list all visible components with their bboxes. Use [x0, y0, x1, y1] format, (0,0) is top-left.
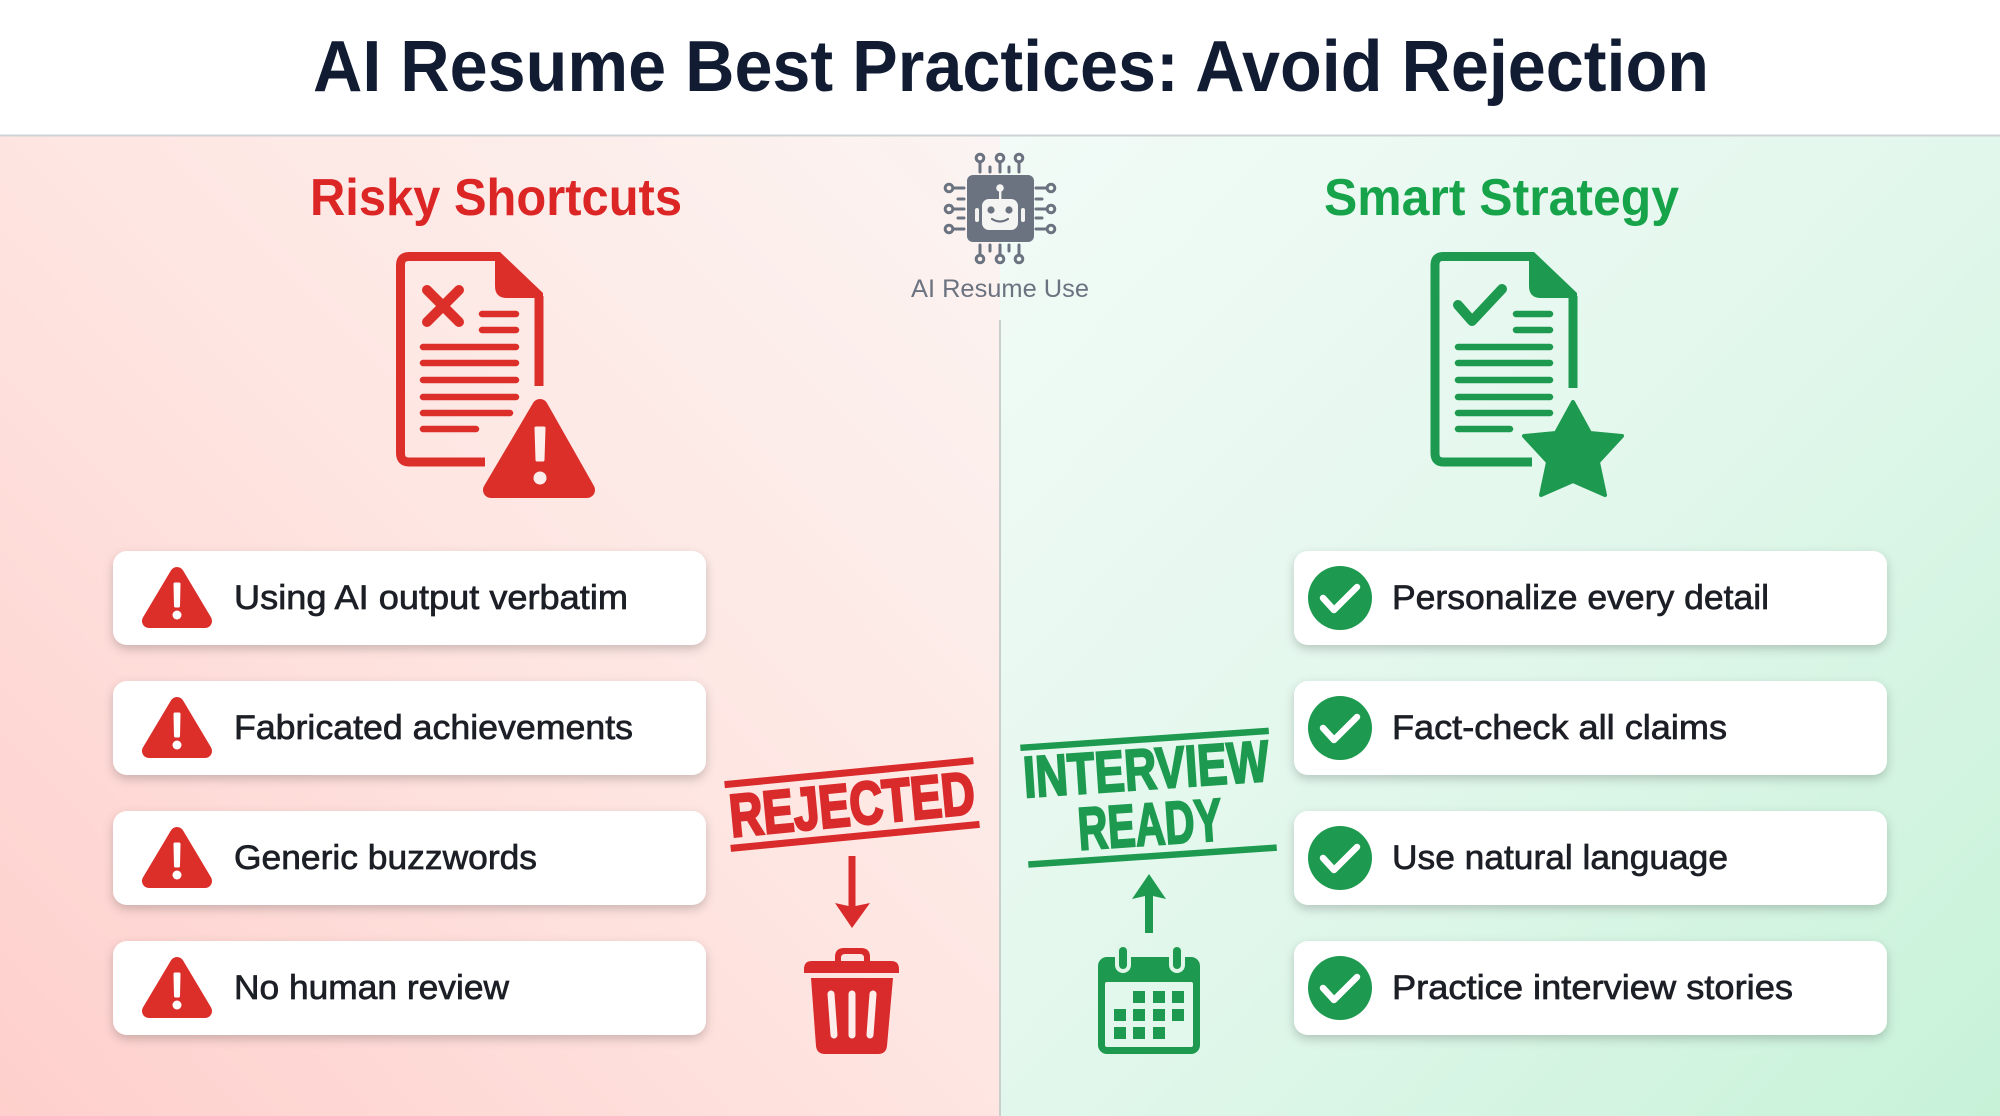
card: No human review: No human review: [234, 969, 509, 1007]
card: Personalize every detail: [1294, 551, 1887, 645]
card: Practice interview stories: [1294, 941, 1887, 1035]
card: Generic buzzwords: [113, 811, 706, 905]
stamp: INTERVIEW READY: READY: [1076, 786, 1224, 863]
stamp: INTERVIEW READY: [1020, 728, 1277, 868]
card: Use natural language: Use natural language: [1392, 839, 1728, 877]
card: Fabricated achievements: [113, 681, 706, 775]
heading: risky shortcuts: Risky Shortcuts: [310, 169, 682, 227]
header band: [0, 0, 2000, 135]
icon: approved resume with star: [1435, 252, 1622, 495]
card: Use natural language: [1294, 811, 1887, 905]
panel: smart list: [1294, 551, 1887, 1035]
heading: smart strategy: Smart Strategy: [1324, 169, 1679, 227]
panel: risky list: [113, 551, 706, 1035]
icon: calendar: [1098, 943, 1200, 1054]
arrow: up from calendar: [1132, 874, 1166, 933]
card: Fact-check all claims: [1294, 681, 1887, 775]
title: AI Resume Best Practices: Avoid Rejection: [313, 27, 1709, 107]
stamp: REJECTED: REJECTED: [726, 759, 978, 850]
icon: AI chip with robot: [945, 154, 1055, 263]
stamp: INTERVIEW READY: INTERVIEW: [1021, 729, 1271, 810]
card: Fabricated achievements: Fabricated achievements: [234, 709, 633, 747]
card: No human review: [113, 941, 706, 1035]
arrow: down to trash: [835, 856, 870, 928]
card: Generic buzzwords: Generic buzzwords: [234, 839, 537, 877]
card: Personalize every detail: Personalize every detail: [1392, 579, 1769, 617]
card: Fact-check all claims: Fact-check all claims: [1392, 709, 1727, 747]
card: Using AI output verbatim: Using AI output verbatim: [234, 579, 628, 617]
icon: trash can: [804, 948, 899, 1054]
icon: rejected resume with warning: [400, 252, 587, 490]
label: AI Resume Use: AI Resume Use: [911, 275, 1089, 303]
panel: risky shortcuts background: [0, 135, 1000, 1116]
panel: smart strategy background: [1000, 135, 2000, 1116]
card: Using AI output verbatim: [113, 551, 706, 645]
card: Practice interview stories: Practice interview stories: [1392, 969, 1793, 1007]
